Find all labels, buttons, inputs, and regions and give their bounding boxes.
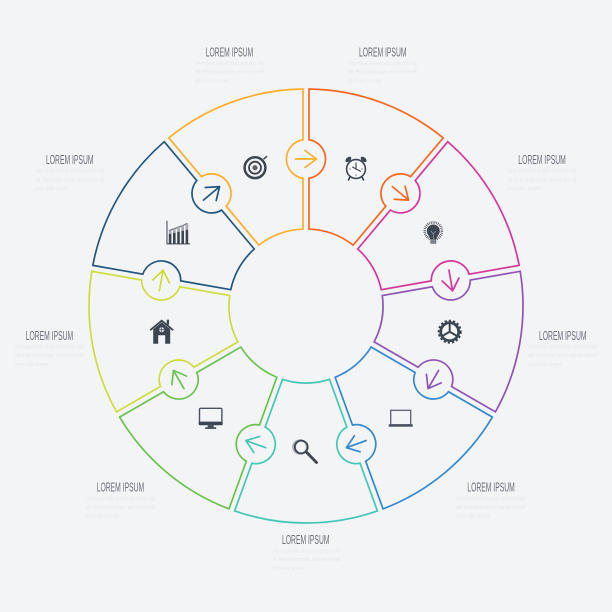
body text: ipsum dolor sit amet (195, 78, 228, 84)
body text (508, 169, 577, 192)
heading: LOREM IPSUM (46, 152, 94, 167)
body text: ipsum dolor sit amet (35, 186, 69, 192)
arrow: green (166, 366, 191, 393)
arrow: navy (198, 180, 225, 207)
segment outline: magenta (347, 142, 551, 348)
body text: ipsum dolor sit amet (271, 566, 305, 572)
body text: elit. Proin ipsum ipsum, sem vel sem elit (86, 505, 155, 511)
body text: ipsum dolor sit amet (15, 362, 48, 368)
icon: target (245, 156, 267, 178)
segment outline: teal (198, 364, 377, 557)
arrow: magenta (441, 269, 461, 292)
body text (86, 496, 155, 520)
body text: ipsum dolor sit amet (508, 186, 541, 192)
icon: laptop (389, 410, 413, 427)
body text (528, 344, 598, 368)
heading: LOREM IPSUM (467, 480, 515, 495)
icon: monitor (199, 408, 223, 429)
body text: elit. Proin ipsum ipsum, sem vel sem elit (348, 70, 418, 76)
icon: light bulb (425, 222, 442, 244)
icon: house (150, 320, 173, 344)
panel: step purple, gear (366, 271, 598, 431)
body text (457, 496, 526, 520)
arrow: amber (296, 150, 316, 168)
heading: LOREM IPSUM (97, 480, 144, 495)
icon: alarm clock (344, 156, 368, 180)
segment outline: blue (290, 339, 492, 533)
segment outline: navy (93, 133, 270, 292)
body text: ipsum dolor sit amet (528, 362, 562, 368)
panel: step teal, magnifier (198, 364, 377, 572)
body text: Lorem ipsum dolor sit amet, consectetur adip (457, 496, 526, 502)
body text: Lorem ipsum dolor sit amet, consectetur adip (195, 61, 264, 67)
body text: Lorem ipsum dolor sit amet, consectetur adip (348, 61, 417, 67)
panel: step navy, bar chart (35, 133, 270, 292)
panel: step magenta, light bulb (347, 142, 577, 348)
heading: LOREM IPSUM (282, 532, 330, 547)
body text: elit. Proin ipsum ipsum, sem vel sem elit (508, 177, 577, 183)
segment outline: lime (50, 218, 252, 412)
segment outline: orange (309, 89, 443, 245)
body text (348, 61, 418, 84)
panel: step blue, laptop (290, 339, 526, 533)
body text: elit. Proin ipsum ipsum, sem vel sem elit (35, 177, 105, 183)
body text: Lorem ipsum dolor sit amet, consectetur adip (35, 169, 104, 175)
arrow: teal (243, 433, 268, 456)
body text (271, 548, 341, 572)
body text: Lorem ipsum dolor sit amet, consectetur adip (271, 548, 340, 554)
arrow: orange (387, 180, 414, 207)
panel: step orange, alarm clock (309, 44, 443, 245)
segment outline: amber (169, 52, 372, 257)
icon: gear (439, 321, 460, 342)
heading: LOREM IPSUM (359, 44, 406, 60)
panel: step amber, target (169, 44, 372, 257)
body text: elit. Proin ipsum ipsum, sem vel sem elit (195, 70, 264, 76)
panel: step lime, house (15, 218, 252, 412)
body text (15, 344, 84, 368)
body text: Lorem ipsum dolor sit amet, consectetur adip (508, 169, 577, 175)
heading: LOREM IPSUM (518, 152, 566, 167)
body text: ipsum dolor sit amet (348, 78, 382, 84)
panel: step green, monitor (86, 316, 282, 520)
body text: Lorem ipsum dolor sit amet, consectetur adip (15, 344, 84, 350)
segment outline: purple (366, 271, 544, 431)
body text (195, 61, 264, 84)
body text: ipsum dolor sit amet (457, 514, 490, 520)
heading: LOREM IPSUM (206, 44, 253, 60)
arrow: purple (421, 366, 446, 393)
arrow: blue (344, 433, 369, 456)
body text: elit. Proin ipsum ipsum, sem vel sem elit (15, 353, 84, 359)
arrow: lime (151, 269, 171, 292)
body text: Lorem ipsum dolor sit amet, consectetur adip (86, 496, 155, 502)
segment outline: green (103, 316, 282, 509)
body text: elit. Proin ipsum ipsum, sem vel sem elit (457, 505, 526, 511)
body text (35, 169, 105, 192)
body text: elit. Proin ipsum ipsum, sem vel sem elit (271, 557, 341, 563)
icon: bar chart (167, 221, 190, 244)
body text: ipsum dolor sit amet (86, 514, 119, 520)
icon: magnifier (293, 440, 316, 462)
heading: LOREM IPSUM (26, 328, 73, 343)
